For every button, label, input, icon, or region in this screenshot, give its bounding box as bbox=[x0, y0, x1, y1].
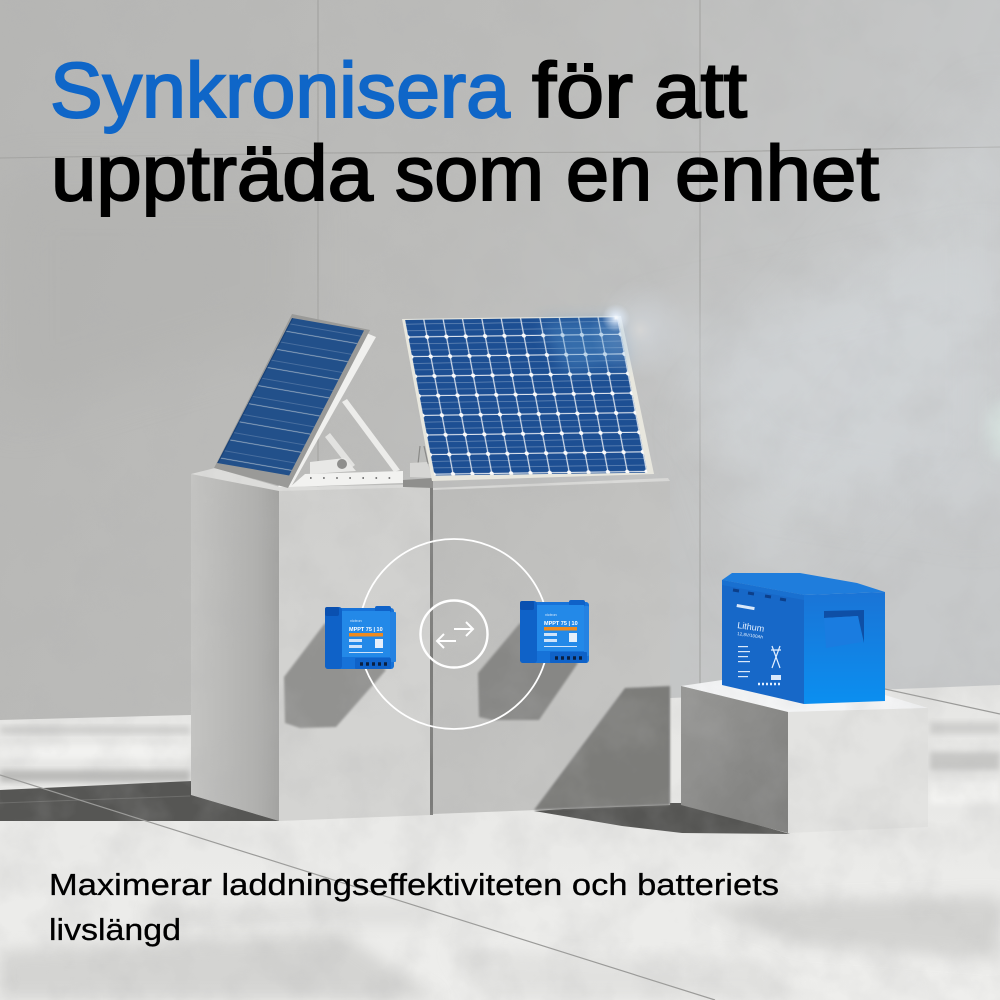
icon: sync arrows bbox=[420, 600, 488, 668]
title: uppträda bbox=[51, 129, 374, 217]
shadow of battery block on centre block bbox=[534, 686, 670, 810]
shadow of left controller bbox=[284, 623, 386, 728]
right solar panel bbox=[402, 316, 654, 481]
title bbox=[50, 46, 879, 217]
right charge controller: MPPT 75 | 10 bbox=[544, 621, 578, 627]
caption bbox=[49, 867, 779, 947]
battery bbox=[722, 573, 885, 704]
left solar panel bbox=[214, 314, 370, 488]
caption: livslängd bbox=[49, 912, 181, 947]
plinth: battery block bbox=[681, 680, 928, 833]
sun glare bbox=[590, 280, 690, 380]
plinth: centre block bbox=[430, 478, 670, 815]
left charge controller: victron bbox=[350, 618, 362, 623]
left charge controller bbox=[325, 606, 396, 669]
shadow of right controller bbox=[478, 623, 578, 720]
right charge controller bbox=[520, 600, 589, 663]
title: en bbox=[566, 129, 652, 217]
title: att bbox=[654, 46, 747, 134]
left charge controller: MPPT 75 | 10 bbox=[349, 627, 383, 633]
plinth: left block bbox=[191, 468, 430, 821]
left solar panel stand bbox=[278, 332, 403, 487]
caption: Maximerar laddningseffektiviteten och batteriets bbox=[49, 867, 779, 902]
wall background bbox=[0, 0, 1000, 730]
title: som bbox=[395, 129, 544, 217]
title word accent: Synkronisera bbox=[50, 46, 511, 134]
battery lid slots bbox=[733, 590, 786, 600]
battery label bbox=[736, 604, 781, 684]
battery label: 12,8V/100Ah bbox=[737, 631, 764, 640]
title: enhet bbox=[675, 129, 879, 217]
right charge controller: victron bbox=[545, 612, 557, 617]
battery label: Lithum bbox=[737, 620, 765, 634]
floor bbox=[0, 685, 1000, 1000]
battery handle bbox=[824, 610, 864, 643]
large sync circle bbox=[359, 539, 549, 729]
right panel bracket bbox=[403, 446, 433, 488]
title: för bbox=[532, 46, 633, 134]
